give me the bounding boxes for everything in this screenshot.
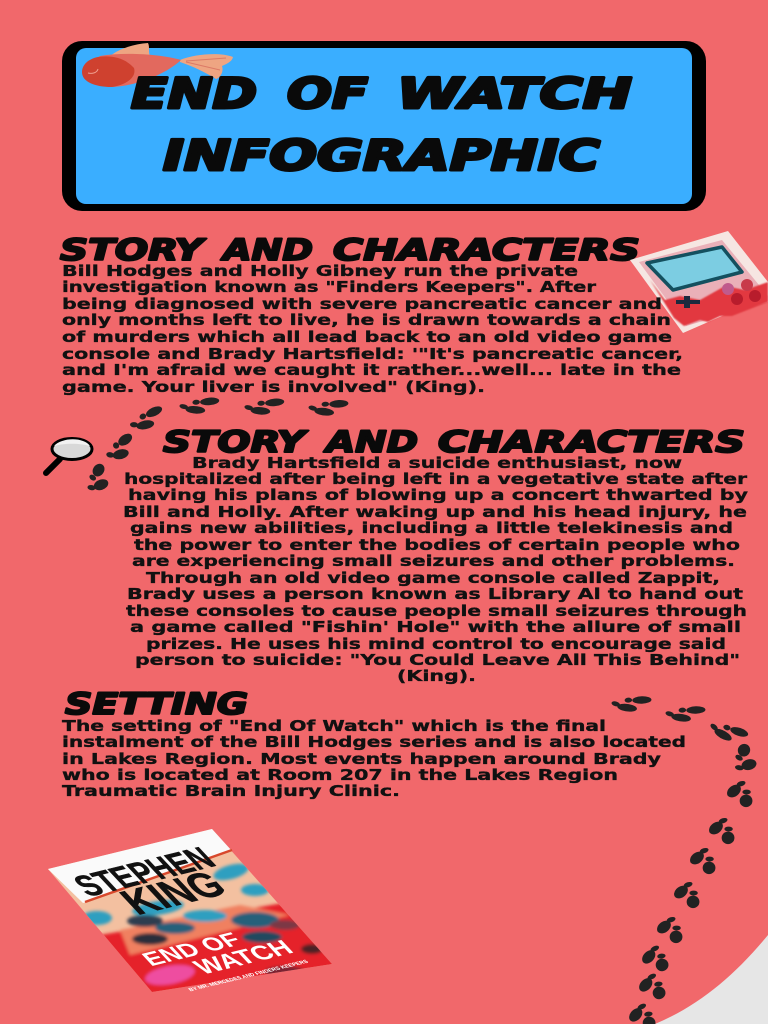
text block: Brady Hartsfield summary: hospitalized after being left in a vegetative state after [124,470,748,488]
book cover text: BY MR. MERCEDES AND FINDERS KEEPERS [188,960,310,993]
text block: Brady Hartsfield summary: Through an old video game console called Zappit, [146,569,720,587]
text block: Brady Hartsfield summary: the power to enter the bodies of certain people who [134,536,740,554]
book cover text: WATCH [188,936,299,979]
text block: story summary: console and Brady Hartsfield: '"It's pancreatic cancer, [62,345,683,363]
text block: setting description: instalment of the Bill Hodges series and is also located [62,733,686,751]
section heading: story and characters 1: AND [220,233,313,267]
book cover text: STEPHEN [65,841,223,903]
section heading: setting: SETTING [65,687,248,721]
title text: END [131,69,257,118]
text block: Brady Hartsfield summary: Brady uses a person known as Library Al to hand out [127,585,743,603]
title text: WATCH [397,69,632,118]
footprints trail: upper [81,397,349,499]
grey corner curve [655,935,768,1024]
text block: Brady Hartsfield summary: a game called "Fishin' Hole" with the allure of small [130,618,741,636]
book cover text: KING [111,864,236,922]
section heading: story and characters 1 [60,233,640,267]
text block: story summary: and I'm afraid we caught it rather...well... late in the [62,361,681,379]
book cover: End of Watch [48,829,340,1000]
section heading: story and characters 2 [163,425,745,459]
text block: story summary: only months left to live, he is drawn towards a chain [62,311,671,329]
title text: OF [287,69,368,118]
text block: Brady Hartsfield summary: are experiencing small seizures and other problems. [132,552,735,570]
icon: game console [630,231,768,333]
footprints trail: lower [610,696,765,1024]
text block: Brady Hartsfield summary: gains new abilities, including a little telekinesis and [130,519,733,537]
text block: setting description: in Lakes Region. Most events happen around Brady [62,750,661,768]
text block: Brady Hartsfield summary: prizes. He uses his mind control to encourage said [146,635,726,653]
text block: Brady Hartsfield summary: (King). [397,667,476,685]
section heading: story and characters 1: STORY [60,233,207,267]
text block: setting description: who is located at Room 207 in the Lakes Region [62,766,618,784]
text block: setting description [62,717,686,800]
book cover text: END OF [137,929,247,971]
section heading: story and characters 2: STORY [163,425,309,459]
text block: Brady Hartsfield summary: having his plans of blowing up a concert thwarted by [128,486,748,504]
section heading: story and characters 1: CHARACTERS [333,233,640,267]
text block: Brady Hartsfield summary: person to suicide: "You Could Leave All This Behind" [135,651,740,669]
section heading: story and characters 2: AND [323,425,418,459]
text block: setting description: The setting of "End Of Watch" which is the final [62,717,606,735]
title banner [62,41,706,211]
text block: Brady Hartsfield summary: these consoles to cause people small seizures through [126,602,747,620]
icon: magnifying glass [46,438,92,473]
text block: Brady Hartsfield summary: Brady Hartsfield a suicide enthusiast, now [192,454,682,472]
title text: INFOGRAPHIC [163,131,600,180]
text block: story summary [62,262,683,396]
text block: story summary: investigation known as "Finders Keepers". After [62,278,597,296]
text block: Brady Hartsfield summary: Bill and Holly. After waking up and his head injury, he [123,503,747,521]
section heading: story and characters 2: CHARACTERS [438,425,745,459]
text block: story summary: of murders which all lead back to an old video game [62,328,672,346]
text block: Brady Hartsfield summary [123,454,748,685]
text block: story summary: game. Your liver is involved" (King). [62,378,485,396]
text block: story summary: Bill Hodges and Holly Gibney run the private [62,262,578,280]
text block: story summary: being diagnosed with severe pancreatic cancer and [62,295,662,313]
book cover art: fish [82,861,340,1000]
title text [131,69,632,180]
icon: fish [82,43,233,87]
book cover text [63,841,310,996]
text block: setting description: Traumatic Brain Injury Clinic. [62,782,400,800]
